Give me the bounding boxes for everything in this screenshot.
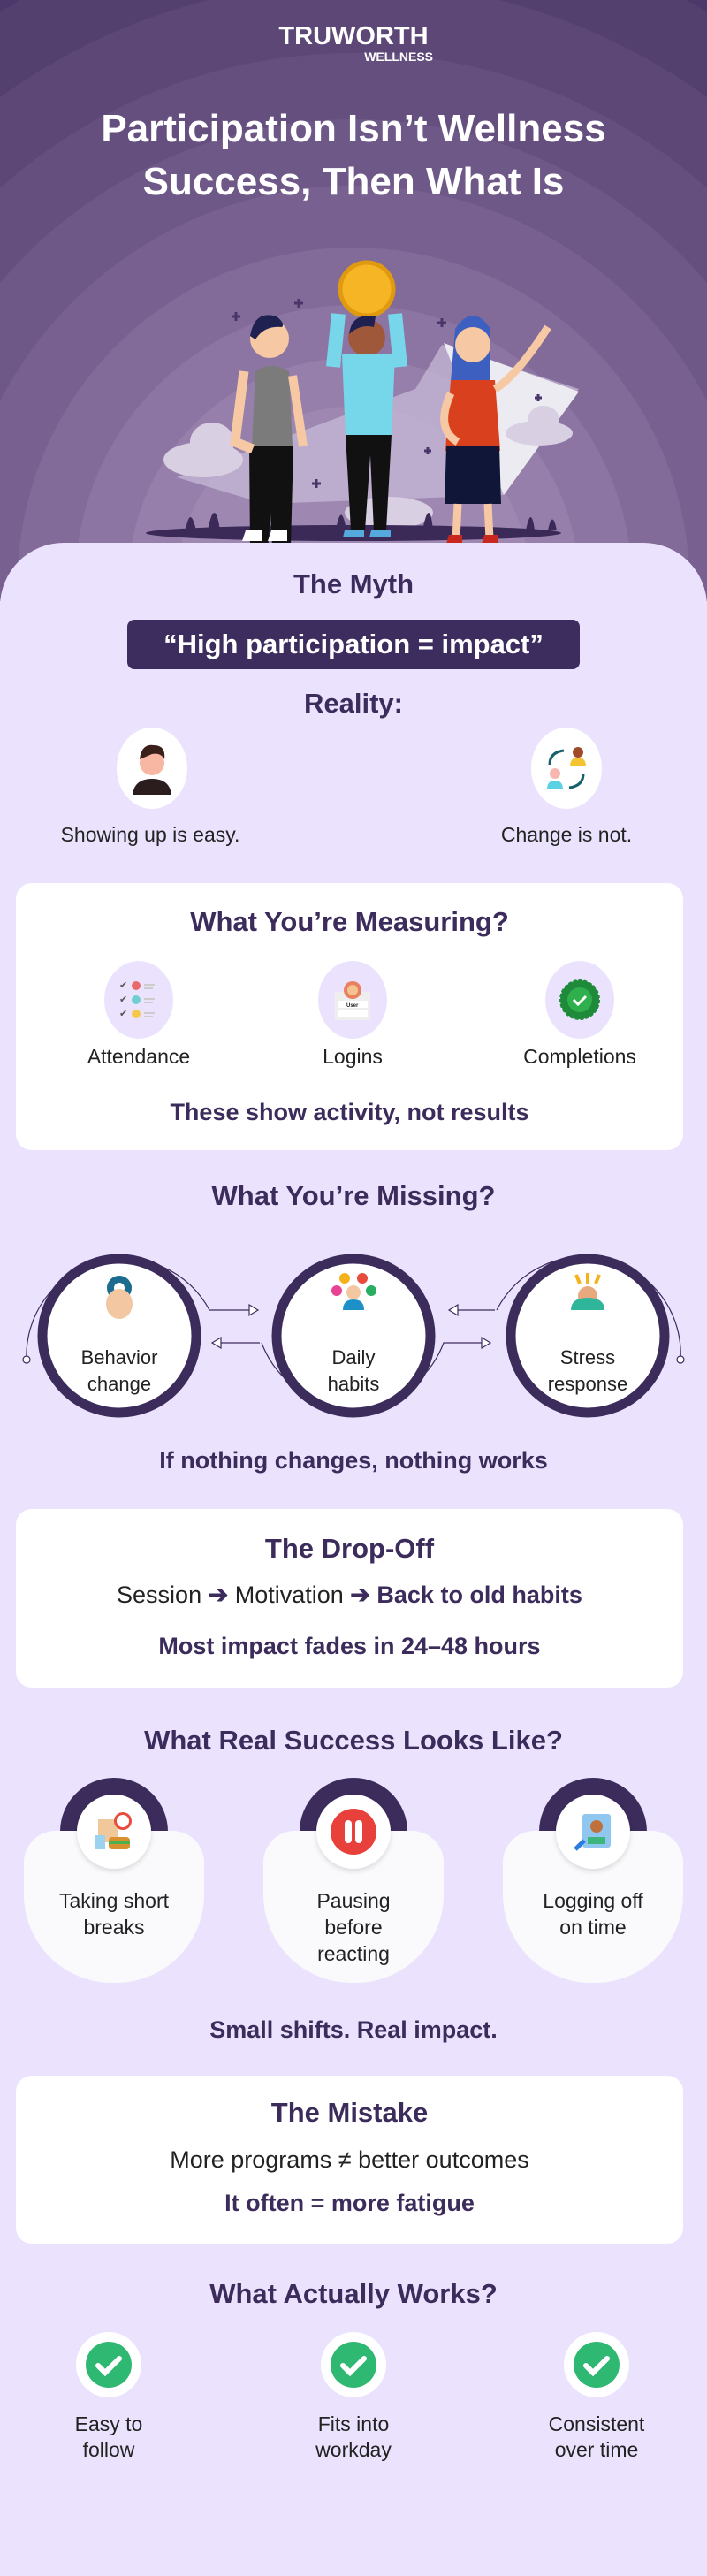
logo — [278, 22, 433, 64]
reality item: change — [531, 728, 602, 809]
diagram: missing cycle — [22, 1254, 685, 1418]
circle: stress response: Stress — [560, 1346, 615, 1368]
logo: TRUWORTH — [278, 22, 429, 50]
label: attendance: Attendance — [87, 1045, 190, 1068]
card: short breaks: Taking short — [59, 1889, 169, 1912]
card: logging off — [503, 1778, 683, 1983]
card: what you're measuring — [16, 883, 683, 1150]
label: completions: Completions — [523, 1045, 636, 1068]
circle: daily habits: habits — [328, 1373, 379, 1395]
reality item: showing up — [117, 728, 187, 809]
card: pausing: Pausing — [316, 1889, 391, 1912]
line 2: It often = more fatigue — [224, 2190, 475, 2216]
card: pausing — [263, 1778, 444, 1983]
label: logins: Logins — [323, 1045, 383, 1068]
item: fits into workday — [315, 2332, 392, 2461]
icon: attendance: ✔ — [119, 995, 127, 1005]
card: the mistake — [16, 2076, 683, 2244]
card: short breaks — [24, 1778, 204, 1983]
text: small shifts: Small shifts. Real impact. — [209, 2016, 498, 2043]
flow line: Session ➔ Motivation ➔ Back to old habits — [117, 1581, 582, 1608]
circle: daily habits — [277, 1259, 430, 1413]
item: easy to follow: follow — [83, 2438, 134, 2461]
icon: person — [117, 728, 187, 809]
success cards — [24, 1778, 683, 1983]
circle: behavior change: change — [87, 1373, 151, 1395]
header background — [0, 0, 707, 601]
icon: attendance — [104, 961, 173, 1039]
icon: logins — [318, 961, 387, 1039]
item: easy to follow — [75, 2332, 142, 2461]
card: pausing: before — [324, 1916, 383, 1939]
light content panel — [0, 543, 707, 2576]
heading: Reality: Reality: — [304, 688, 403, 719]
fade text: Most impact fades in 24–48 hours — [158, 1633, 541, 1659]
text: change is not: Change is not. — [501, 823, 632, 846]
icon: attendance: ✔ — [119, 1009, 127, 1019]
icon: logins: User — [346, 1003, 359, 1009]
logo: WELLNESS — [364, 50, 433, 64]
circle: stress response: response — [548, 1373, 627, 1395]
circle: daily habits: Daily — [332, 1346, 375, 1368]
heading: The Mistake — [271, 2097, 428, 2128]
icon: attendance: ✔ — [119, 980, 127, 991]
illustration: three people celebrating — [146, 260, 579, 543]
heading: what actually works: What Actually Works? — [209, 2278, 498, 2309]
heading: what you're missing: What You’re Missing? — [212, 1180, 495, 1211]
card: logging off: Logging off — [543, 1889, 643, 1912]
icon: completions badge — [545, 961, 614, 1039]
heading: What You’re Measuring? — [190, 906, 509, 937]
icon: swap people — [531, 728, 602, 809]
circle: behavior change — [42, 1259, 196, 1413]
item: easy to follow: Easy to — [75, 2412, 142, 2435]
item: fits into workday: workday — [315, 2438, 392, 2461]
circle: stress response — [511, 1259, 665, 1413]
card: logging off: on time — [559, 1916, 627, 1939]
heading: The Drop-Off — [265, 1533, 434, 1564]
footer text: These show activity, not results — [170, 1099, 529, 1125]
title — [101, 107, 606, 203]
item: consistent over time: Consistent — [549, 2412, 644, 2435]
text: if nothing changes: If nothing changes, nothing works — [159, 1447, 548, 1474]
checklist items — [75, 2332, 645, 2461]
title: Participation Isn’t Wellness — [101, 107, 606, 150]
myth quote box — [127, 620, 580, 669]
card: the drop-off — [16, 1509, 683, 1688]
line 1: More programs ≠ better outcomes — [170, 2146, 529, 2173]
item: consistent over time — [549, 2332, 645, 2461]
text: showing up is easy: Showing up is easy. — [61, 823, 239, 846]
card: short breaks: breaks — [83, 1916, 145, 1939]
myth quote box: “High participation = impact” — [163, 629, 544, 659]
circle: behavior change: Behavior — [81, 1346, 157, 1368]
title: Success, Then What Is — [143, 160, 564, 203]
heading: what real success looks like: What Real Success Looks Like? — [144, 1725, 563, 1756]
item: fits into workday: Fits into — [318, 2412, 389, 2435]
card: pausing: reacting — [317, 1942, 390, 1965]
item: consistent over time: over time — [555, 2438, 638, 2461]
heading: The Myth: The Myth — [293, 568, 414, 599]
